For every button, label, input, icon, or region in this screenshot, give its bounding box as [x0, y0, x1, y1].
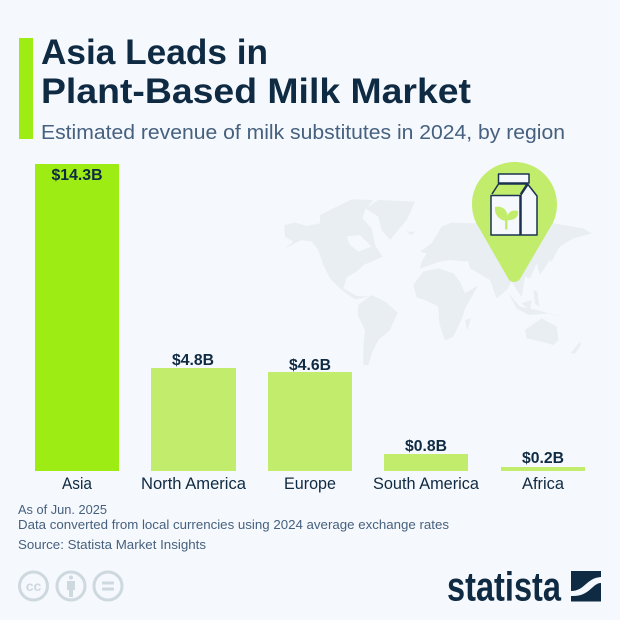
footnotes: Data converted from local currencies using 2024 average exchange rates [18, 518, 449, 532]
bar: Asia [35, 164, 119, 493]
bar: North America: $4.8B [172, 352, 214, 369]
world map background [284, 199, 592, 365]
bar: South America [373, 438, 480, 493]
statista logo: statista [447, 564, 562, 610]
license icons [20, 572, 122, 600]
icon: sprout [495, 207, 518, 230]
bar: Europe [268, 357, 352, 493]
bar: Europe: Europe [284, 475, 336, 493]
icon: creative commons: cc [26, 578, 41, 594]
bar: Africa: Africa [522, 475, 565, 493]
bar chart [35, 164, 585, 493]
icon: attribution [57, 572, 85, 600]
title [41, 32, 471, 111]
bar: North America: North America [141, 475, 247, 493]
bar: Africa: $0.2B [522, 450, 564, 467]
map: Europe, Asia, Africa, Australia [413, 217, 592, 353]
title accent bar [19, 38, 33, 139]
footnotes: As of Jun. 2025 [18, 503, 107, 517]
subtitle: Estimated revenue of milk substitutes in 2024, by region [41, 121, 565, 144]
icon: milk carton [491, 174, 537, 235]
bar: Europe: $4.6B [289, 357, 331, 374]
title: Asia Leads in [41, 32, 268, 72]
bar: South America: South America [373, 475, 480, 493]
bar: South America: $0.8B [405, 438, 447, 455]
footnotes: Source: Statista Market Insights [18, 538, 206, 552]
map: Americas and Greenland [284, 199, 415, 365]
logo mark [571, 571, 601, 602]
title: Plant-Based Milk Market [41, 71, 471, 111]
icon: map pin with milk carton [472, 162, 557, 282]
bar: Africa [501, 450, 585, 493]
bar: Asia: Asia [62, 475, 93, 493]
icon: no derivatives [94, 572, 122, 600]
bar: North America [141, 352, 247, 493]
footnotes [18, 503, 449, 552]
bar: Asia: $14.3B [52, 167, 102, 184]
